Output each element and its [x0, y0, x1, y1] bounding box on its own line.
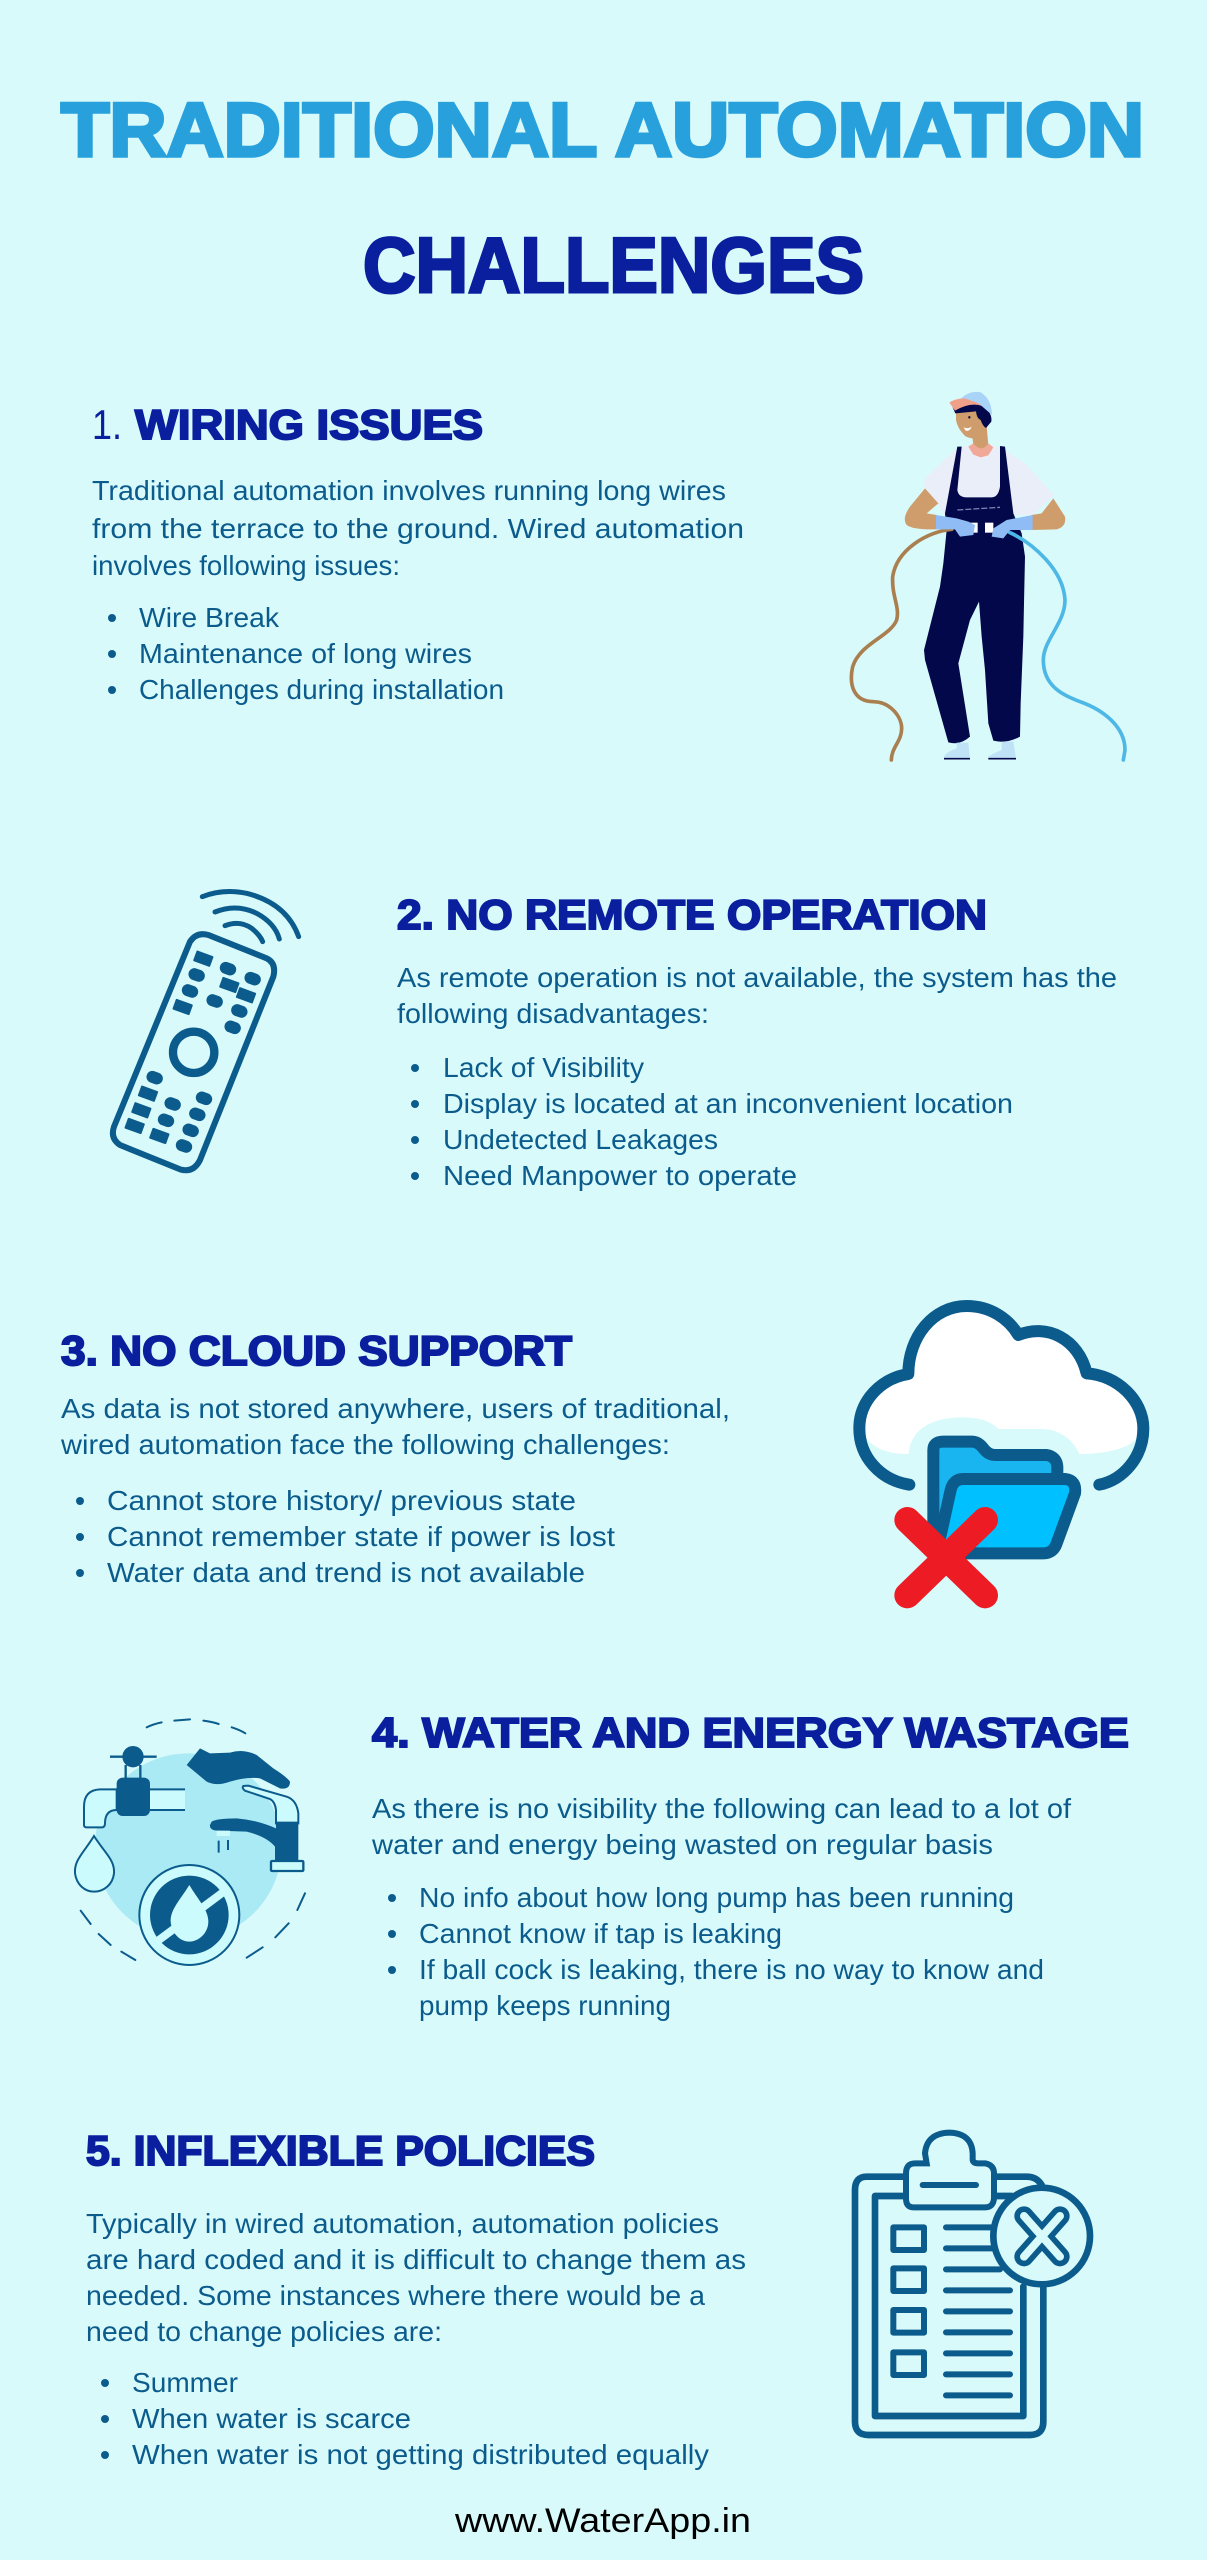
paragraph: wiring intro: involves following issues: [92, 550, 400, 581]
paragraph: remote intro: As remote operation is not available, the system has the [397, 962, 1117, 993]
panel: wiring issues [92, 392, 1125, 760]
bullet list: policies: When water is scarce [132, 2403, 411, 2434]
bullet list: remote [411, 1052, 1013, 1191]
paragraph: wastage intro [371, 1793, 1071, 1860]
paragraph: cloud intro [60, 1393, 730, 1460]
icon: remote control [113, 891, 299, 1170]
icon: cloud folder with red cross [859, 1306, 1143, 1595]
bullet list: policies: Summer [132, 2367, 238, 2398]
bullet list: cloud: Cannot store history/ previous state [107, 1485, 576, 1516]
paragraph: wiring intro: Traditional automation involves running long wires [92, 475, 726, 506]
paragraph: policies intro: need to change policies are: [86, 2316, 442, 2347]
bullet list: remote: Need Manpower to operate [443, 1160, 797, 1191]
bullet list: remote: Undetected Leakages [443, 1124, 718, 1155]
paragraph: wiring intro [92, 475, 744, 581]
icon: worker holding wires [851, 392, 1125, 760]
bullet list: wiring: Challenges during installation [139, 674, 504, 705]
bullet list: cloud [76, 1485, 615, 1588]
bullet list: wastage: pump keeps running [419, 1990, 671, 2021]
footer: website: www.WaterApp.in [454, 2502, 751, 2540]
bullet list: wastage: No info about how long pump has been running [419, 1882, 1014, 1913]
paragraph: remote intro [397, 962, 1117, 1029]
bullet list: wiring [108, 602, 504, 705]
panel: no cloud support [60, 1306, 1143, 1595]
heading: no cloud support: 3. NO CLOUD SUPPORT [61, 1327, 572, 1374]
heading: water and energy wastage: 4. WATER AND ENERGY WASTAGE [372, 1709, 1129, 1756]
bullet list: remote: Lack of Visibility [443, 1052, 644, 1083]
paragraph: policies intro: Typically in wired automation, automation policies [86, 2208, 719, 2239]
panel: inflexible policies [86, 2127, 1090, 2470]
paragraph: wastage intro: water and energy being wasted on regular basis [371, 1829, 993, 1860]
bullet list: policies: When water is not getting distributed equally [132, 2439, 709, 2470]
heading: wiring issues: WIRING ISSUES [135, 401, 483, 448]
bullet list: cloud: Water data and trend is not available [107, 1557, 585, 1588]
paragraph: wiring intro: from the terrace to the ground. Wired automation [92, 513, 744, 544]
paragraph: cloud intro: wired automation face the following challenges: [60, 1429, 670, 1460]
bullet list: wastage: Cannot know if tap is leaking [419, 1918, 782, 1949]
paragraph: policies intro: needed. Some instances where there would be a [86, 2280, 705, 2311]
icon: taps and water drop [75, 1719, 305, 1965]
heading: no remote operation: 2. NO REMOTE OPERATION [397, 891, 987, 938]
bullet list: remote: Display is located at an inconvenient location [443, 1088, 1013, 1119]
bullet list: policies [101, 2367, 709, 2470]
panel: no remote operation [113, 891, 1117, 1191]
title [61, 88, 1144, 309]
title: TRADITIONAL AUTOMATION [61, 88, 1144, 173]
bullet list: wastage: If ball cock is leaking, there is no way to know and [419, 1954, 1044, 1985]
bullet list: cloud: Cannot remember state if power is lost [107, 1521, 615, 1552]
paragraph: policies intro: are hard coded and it is difficult to change them as [86, 2244, 746, 2275]
paragraph: policies intro [86, 2208, 746, 2347]
heading: inflexible policies: 5. INFLEXIBLE POLICIES [86, 2127, 595, 2174]
bullet list: wastage [388, 1882, 1044, 2021]
paragraph: wastage intro: As there is no visibility the following can lead to a lot of [372, 1793, 1071, 1824]
icon: clipboard with cross [855, 2133, 1090, 2435]
paragraph: remote intro: following disadvantages: [397, 998, 709, 1029]
paragraph: cloud intro: As data is not stored anywhere, users of traditional, [61, 1393, 730, 1424]
panel: water and energy wastage [75, 1709, 1129, 2021]
title: CHALLENGES [363, 221, 864, 309]
heading: wiring issues: 1. [92, 401, 122, 448]
bullet list: wiring: Wire Break [139, 602, 280, 633]
bullet list: wiring: Maintenance of long wires [139, 638, 472, 669]
